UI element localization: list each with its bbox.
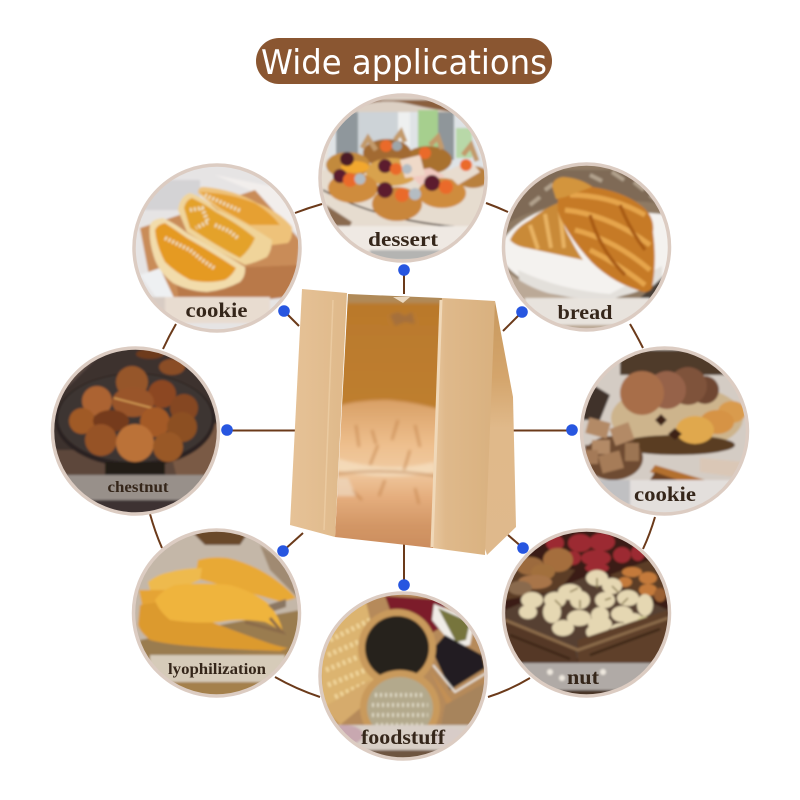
label: lyophilization: lyophilization: [168, 661, 266, 678]
circle frame: [504, 164, 670, 330]
circle frame: [504, 530, 670, 696]
dessert photo: [318, 93, 490, 263]
bag side gusset: [470, 301, 516, 555]
kraft paper bag with window: [290, 288, 516, 556]
label: dessert: dessert: [368, 229, 438, 251]
panel: bread: [500, 160, 675, 335]
dried mango photo: [135, 532, 298, 694]
connecting ring segments: [150, 203, 655, 697]
infographic: wide applications: [50, 38, 750, 761]
circle frame: [320, 95, 486, 261]
blue connector dots: [221, 264, 578, 591]
label: cookie: cookie: [634, 482, 696, 506]
panel: cookie (pastry): [130, 160, 305, 335]
circle frame: [52, 348, 218, 514]
nuts photo: [505, 532, 668, 694]
bag right panel: [433, 298, 495, 555]
croissant photo: [506, 166, 668, 328]
panel: dessert: [318, 93, 490, 263]
grains photo: [322, 594, 484, 758]
title pill: Wide applications: [261, 43, 547, 83]
pastry photo: [136, 166, 298, 330]
panel: chestnut: [50, 345, 222, 520]
chestnut bowl photo: [54, 350, 217, 512]
panel: nut: [500, 527, 675, 704]
label: bread: bread: [558, 302, 612, 324]
bag top flap tab: [393, 297, 410, 303]
label: nut: nut: [567, 665, 599, 689]
circle frame: [582, 348, 748, 514]
label: chestnut: chestnut: [108, 479, 169, 496]
bag left panel: [290, 289, 347, 537]
label: cookie: cookie: [186, 298, 248, 322]
panel: foodstuff: [316, 590, 491, 765]
circle frame: [134, 165, 300, 331]
circle frame: [134, 530, 300, 696]
label: foodstuff: foodstuff: [361, 725, 446, 749]
spokes from bag to blue dots: [227, 270, 572, 585]
circle frame: [320, 593, 486, 759]
biscuits photo: [583, 350, 746, 512]
panel: lyophilization: [130, 527, 305, 702]
bag window with inner paper and bread loaf: [335, 294, 442, 548]
panel: cookie (biscuits): [578, 345, 753, 520]
